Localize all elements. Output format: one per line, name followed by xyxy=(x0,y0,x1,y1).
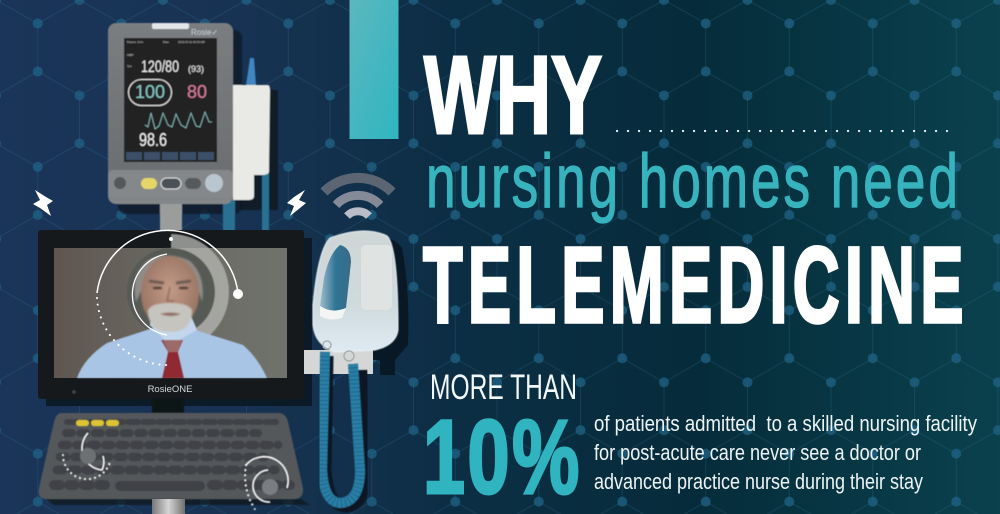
icon: lightning left xyxy=(33,190,53,216)
headline: nursing homes need: nursing homes need xyxy=(426,139,961,223)
monitor screen: Date xyxy=(163,40,169,44)
monitor screen: 100 xyxy=(135,82,165,102)
statistic description: advanced practice nurse during their stay xyxy=(594,469,924,494)
vital signs monitor xyxy=(108,23,278,233)
keyboard overlays xyxy=(63,433,288,511)
top tab xyxy=(152,23,189,29)
monitor screen: NIBP xyxy=(127,53,134,57)
statistic value: 10%: 10% xyxy=(423,399,582,514)
keyboard xyxy=(39,399,310,511)
yellow function keys xyxy=(76,420,119,426)
coiled cord xyxy=(322,352,365,507)
accent bar xyxy=(350,0,398,139)
monitor screen: Sys xyxy=(127,64,132,68)
holder texture xyxy=(361,245,392,310)
side module xyxy=(233,85,270,200)
tablet frame xyxy=(38,230,304,399)
mounting bracket xyxy=(304,350,373,374)
statistic label: MORE THAN: MORE THAN xyxy=(430,368,577,407)
brand: Rosie✓ xyxy=(191,28,218,37)
headline: WHY: WHY xyxy=(424,34,602,157)
thermometer xyxy=(320,245,351,311)
tablet shadow xyxy=(46,238,312,406)
mounting pole xyxy=(160,203,182,233)
dotted rule xyxy=(617,130,947,132)
icon: lightning right xyxy=(287,190,306,216)
handheld device holder and coiled cord xyxy=(304,231,408,507)
monitor screen: 98.6 xyxy=(139,130,167,150)
monitor screen: 2019-03-11 09:30 AM xyxy=(178,40,205,44)
holder shadow xyxy=(330,236,408,375)
icon: wifi signal xyxy=(324,178,392,216)
tablet screen xyxy=(54,248,287,378)
key rows xyxy=(54,422,290,486)
cables and shadow xyxy=(118,30,278,232)
tablet brand: RosieONE xyxy=(148,384,192,395)
monitor screen: 120/80 xyxy=(141,57,179,76)
control buttons xyxy=(108,170,233,198)
monitor screen xyxy=(124,38,217,162)
overlay arcs xyxy=(97,230,238,365)
headline: TELEMEDICINE: TELEMEDICINE xyxy=(423,224,969,345)
monitor screen: 80 xyxy=(187,82,207,102)
statistic description xyxy=(594,411,978,494)
keyboard neck xyxy=(152,399,184,414)
monitor screen: (93) xyxy=(188,64,204,74)
holder body xyxy=(313,231,398,352)
doctor portrait xyxy=(77,234,267,378)
tablet display xyxy=(38,230,312,406)
clip rings xyxy=(323,341,331,349)
monitor screen: Patient: John xyxy=(127,40,144,44)
stand pole xyxy=(152,499,185,514)
keyboard body xyxy=(39,413,303,499)
statistic description: for post-acute care never see a doctor or xyxy=(594,440,921,465)
monitor body xyxy=(108,23,233,204)
